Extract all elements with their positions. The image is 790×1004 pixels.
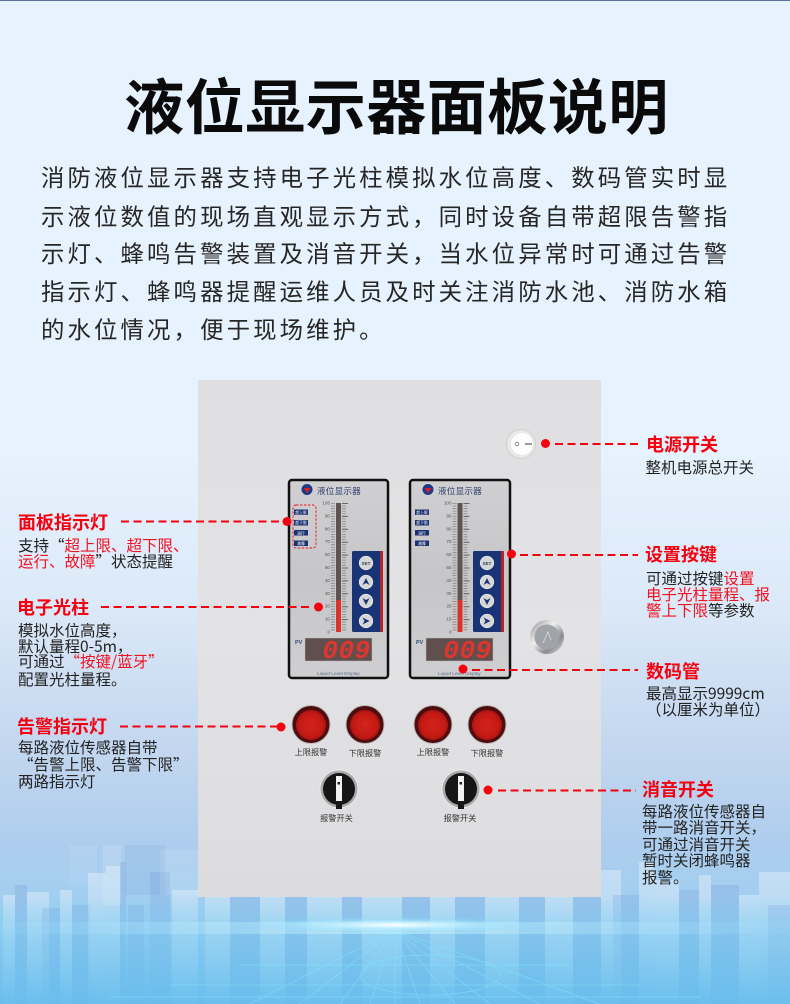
bar scale: 30 (325, 591, 330, 596)
callout: alarm lamp (17, 716, 286, 792)
indicator labels: 超下限 (416, 520, 428, 525)
bar scale: 40 (446, 578, 452, 583)
indicator labels: 故障 (418, 541, 426, 546)
alarm lamps: 上限报警 (295, 747, 327, 757)
digital readout: 009 (443, 636, 492, 666)
callout: mute switch: 暂时关闭蜂鸣器 (642, 849, 751, 871)
display name: 液位显示器 (438, 485, 482, 496)
alarm lamps: 下限报警 (349, 748, 381, 758)
callout: digital tube: 数码管 (646, 661, 700, 682)
intro paragraph (41, 165, 730, 343)
bar scale: 0 (449, 630, 452, 634)
indicator labels: 运行 (418, 530, 426, 535)
callout: mute switch (484, 779, 766, 888)
bar scale: 100 (444, 500, 452, 506)
intro paragraph: 示灯、蜂鸣告警装置及消音开关，当水位异常时可通过告警 (41, 241, 730, 267)
display unit 2 (410, 480, 510, 678)
bar scale: 70 (446, 539, 452, 544)
city skyline background (0, 845, 790, 1004)
intro paragraph: 消防液位显示器支持电子光柱模拟水位高度、数码管实时显 (41, 165, 730, 191)
bar scale: 60 (446, 552, 452, 557)
bar scale: 0 (327, 630, 330, 634)
callout: panel indicator (18, 512, 292, 572)
bar scale (444, 500, 466, 634)
bar scale: 70 (325, 539, 330, 544)
icon: lower limit lamp 2 (468, 706, 506, 744)
bar scale: 50 (325, 565, 330, 570)
icon: steel push button (530, 620, 564, 654)
floor grid (110, 930, 700, 1004)
callout: alarm lamp: 两路指示灯 (18, 770, 96, 792)
callout: mute switch: 报警。 (642, 866, 689, 888)
callout: electronic light column: 可通过“按键/蓝牙” (18, 650, 164, 672)
callout: alarm lamp: “告警上限、告警下限” (18, 753, 189, 775)
bar scale: 20 (446, 604, 452, 609)
indicator labels: 故障 (297, 541, 305, 546)
callout: alarm lamp: 每路液位传感器自带 (18, 736, 158, 758)
callout: digital tube: （以厘米为单位） (646, 698, 770, 720)
callout: power switch (541, 435, 754, 478)
bar scale: 80 (325, 526, 330, 531)
callout: mute switch: 带一路消音开关， (642, 816, 766, 838)
icon: upper limit lamp 2 (414, 706, 452, 744)
icon: power switch (506, 430, 536, 458)
bar scale: 20 (325, 604, 330, 609)
display unit 1 (289, 480, 388, 678)
bar scale: 10 (325, 617, 330, 622)
callout: mute switch: 消音开关 (642, 779, 714, 800)
icon: brand logo (422, 484, 434, 495)
callout: electronic light column (17, 598, 323, 690)
callout: digital tube: 最高显示9999cm (646, 682, 765, 704)
bar scale: 90 (446, 513, 452, 518)
bar scale: 60 (325, 552, 330, 557)
callout: power switch: 电源开关 (646, 435, 718, 455)
icon: mute switch 1 (320, 770, 358, 809)
callout: alarm lamp: 告警指示灯 (17, 716, 107, 737)
indicator labels: 超上限 (416, 510, 428, 515)
alarm lamps: 上限报警 (417, 747, 449, 757)
bar scale (322, 500, 345, 634)
intro paragraph: 示液位数值的现场直观显示方式，同时设备自带超限告警指 (41, 204, 730, 230)
digital readout (416, 636, 493, 666)
digital readout: PV (416, 640, 424, 646)
intro paragraph: 的水位情况，便于现场维护。 (41, 317, 386, 343)
callout: electronic light column: 默认量程0-5m， (18, 635, 132, 657)
callout: panel indicator: 支持“超上限、超下限、 (18, 534, 189, 556)
bar scale: 80 (446, 526, 452, 531)
callout: setting buttons: 可通过按键设置 (646, 567, 755, 589)
callout: mute switch: 可通过消音开关 (642, 833, 751, 855)
callout: panel indicator: 运行、故障”状态提醒 (18, 550, 173, 572)
indicator labels: 超下限 (295, 520, 307, 525)
bar scale: 30 (446, 591, 452, 596)
indicator labels (415, 510, 429, 546)
display name: 液位显示器 (317, 485, 361, 496)
callout: setting buttons: 警上下限等参数 (646, 599, 755, 621)
indicator labels: 超上限 (295, 510, 307, 515)
digital readout: 009 (322, 636, 371, 666)
callout: electronic light column: 配置光柱量程。 (18, 668, 127, 690)
bar scale: 100 (322, 500, 330, 506)
icon: lower limit lamp 1 (346, 706, 384, 744)
bar scale: 90 (325, 513, 330, 518)
alarm lamps (292, 706, 506, 758)
callout: power switch: 整机电源总开关 (646, 456, 754, 478)
callout: setting buttons: 设置按键 (645, 544, 717, 565)
keypad: SET (483, 561, 492, 566)
digital readout: PV (295, 640, 303, 646)
callout: electronic light column: 模拟水位高度， (18, 619, 127, 641)
callout: setting buttons (507, 544, 770, 621)
callout: panel indicator: 面板指示灯 (18, 512, 108, 533)
indicator labels: 运行 (297, 530, 305, 535)
bar scale: 50 (446, 565, 452, 570)
keypad (473, 551, 504, 632)
panel: cabinet (198, 380, 601, 897)
keypad (352, 551, 383, 632)
intro paragraph: 指示灯、蜂鸣器提醒运维人员及时关注消防水池、消防水箱 (41, 279, 730, 305)
icon: upper limit lamp 1 (292, 706, 330, 744)
footer label: Liquid Level Display (317, 671, 360, 677)
title: 液位显示器面板说明 (124, 75, 669, 142)
callout: electronic light column: 电子光柱 (17, 598, 89, 618)
icon: mute switch 2 (442, 770, 480, 809)
icon: brand logo (302, 484, 312, 495)
digital readout (295, 636, 372, 666)
alarm lamps: 下限报警 (471, 748, 503, 758)
bar scale: 40 (325, 578, 330, 583)
footer label: Liquid Level Display (438, 671, 481, 677)
keypad: SET (362, 561, 371, 566)
panel: cabinet: 报警开关 (444, 813, 476, 823)
horizon glow (0, 917, 790, 934)
panel: cabinet: 报警开关 (320, 813, 353, 823)
callout: digital tube (458, 661, 770, 720)
indicator labels (293, 505, 316, 548)
callout: mute switch: 每路液位传感器自 (642, 800, 766, 822)
bar scale: 10 (446, 617, 452, 622)
callout: setting buttons: 电子光柱量程、报 (646, 583, 770, 605)
